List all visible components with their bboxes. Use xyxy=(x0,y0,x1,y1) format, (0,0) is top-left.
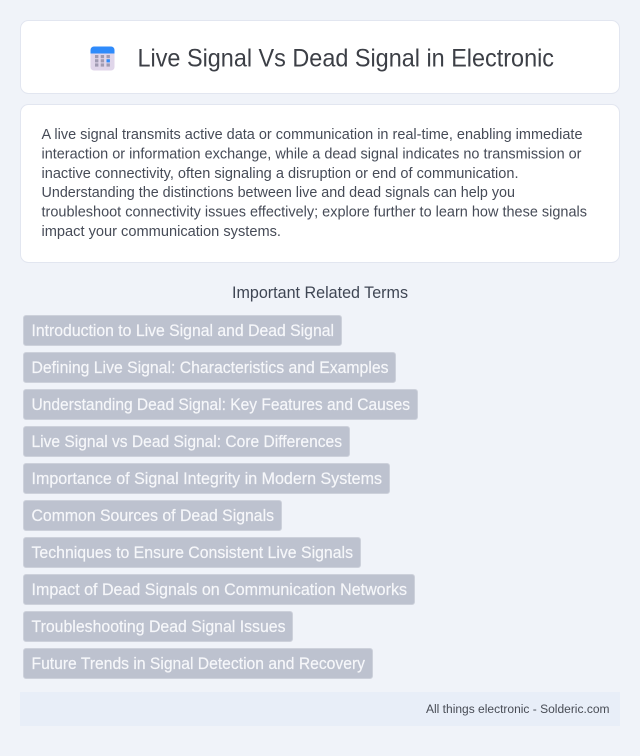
term 9: Troubleshooting Dead Signal Issues xyxy=(32,618,286,636)
description text: troubleshoot connectivity issues effectively; explore further to learn how these signals xyxy=(42,205,587,221)
term 8: Impact of Dead Signals on Communication Networks xyxy=(32,581,407,599)
term 6: Common Sources of Dead Signals xyxy=(32,507,274,525)
description text: impact your communication systems. xyxy=(42,224,281,240)
description text: Understanding the distinctions between live and dead signals can help you xyxy=(42,185,515,201)
list of related terms xyxy=(24,316,418,678)
term 1: Introduction to Live Signal and Dead Signal xyxy=(32,322,334,340)
footer bar xyxy=(20,692,620,726)
header card xyxy=(20,20,620,94)
description text xyxy=(42,127,587,240)
footer text: All things electronic - Solderic.com xyxy=(426,702,610,716)
description text: inactive connectivity, often signaling a disruption or end of communication. xyxy=(42,166,518,182)
term 4 xyxy=(24,426,350,456)
term 7: Techniques to Ensure Consistent Live Signals xyxy=(32,544,353,562)
term 5: Importance of Signal Integrity in Modern Systems xyxy=(32,470,382,488)
panel: description xyxy=(20,104,620,262)
term 7 xyxy=(24,538,360,568)
term 2 xyxy=(24,352,396,382)
footer xyxy=(20,692,620,726)
term 10: Future Trends in Signal Detection and Recovery xyxy=(32,655,366,673)
term 2: Defining Live Signal: Characteristics and Examples xyxy=(32,359,388,377)
term 3 xyxy=(24,390,418,420)
description text: A live signal transmits active data or communication in real-time, enabling immediate xyxy=(42,127,582,143)
section heading: Important Related Terms xyxy=(232,284,408,302)
title: Live Signal Vs Dead Signal in Electronic xyxy=(138,46,554,72)
term 3: Understanding Dead Signal: Key Features and Causes xyxy=(32,396,410,414)
term 5 xyxy=(24,464,390,494)
icon: calendar xyxy=(90,46,114,70)
term 6 xyxy=(24,500,282,530)
term 9 xyxy=(24,612,292,642)
term 4: Live Signal vs Dead Signal: Core Differences xyxy=(32,433,342,451)
term 8 xyxy=(24,574,414,604)
term 10 xyxy=(24,648,372,678)
description text: interaction or information exchange, while a dead signal indicates no transmission or xyxy=(42,146,582,162)
panel: header xyxy=(20,20,620,94)
description card xyxy=(20,104,620,262)
term 1 xyxy=(24,316,342,346)
